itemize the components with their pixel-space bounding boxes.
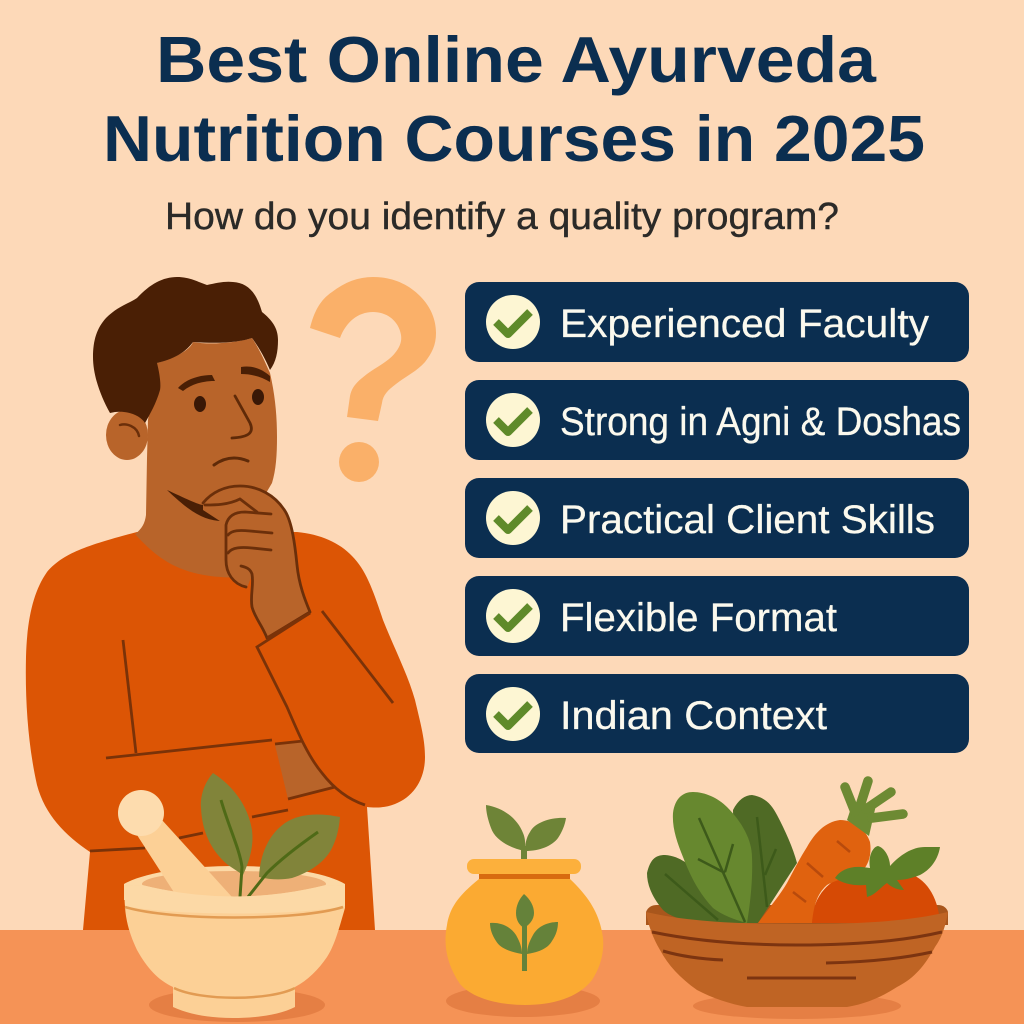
chin shadow: [167, 490, 238, 521]
checklist: [465, 282, 969, 753]
mortar lip: [124, 885, 345, 914]
hair: [93, 277, 278, 423]
ear: [106, 410, 148, 460]
sprout: [486, 805, 566, 859]
item: Flexible Format: [465, 576, 969, 656]
item: Practical Client Skills: Practical Client Skills: [560, 498, 935, 542]
basket back rim: [646, 905, 948, 925]
title: [103, 23, 925, 175]
sleeve fold lines: [106, 611, 393, 758]
pestle: [118, 790, 232, 897]
icon: pot with sprout: [446, 805, 603, 1017]
item: Strong in Agni & Doshas: Strong in Agni & Doshas: [560, 400, 961, 444]
title: Best Online Ayurveda: [156, 23, 877, 96]
mortar back rim: [124, 866, 345, 900]
icon: vegetable basket: [646, 781, 948, 1019]
spinach leaves: [647, 792, 797, 923]
eyebrows: [178, 366, 270, 391]
subtitle: How do you identify a quality program?: [165, 196, 839, 238]
mortar bowl: [124, 885, 345, 1018]
pot body: [446, 879, 603, 1005]
mouth: [214, 458, 248, 465]
eyes: [194, 389, 264, 412]
item: Experienced Faculty: Experienced Faculty: [560, 302, 929, 346]
waist gap skin patch: [275, 742, 334, 799]
leaves: [201, 773, 340, 897]
table surface: [0, 930, 1024, 1024]
nose: [232, 396, 251, 438]
hand: [203, 486, 310, 638]
tomato calyx: [835, 846, 940, 897]
question mark icon: [310, 277, 436, 482]
person: [26, 277, 425, 930]
item: Experienced Faculty: [465, 282, 969, 362]
basket bowl: [646, 912, 948, 1007]
carrot: [758, 820, 871, 923]
title: Nutrition Courses in 2025: [103, 102, 925, 175]
item: Indian Context: Indian Context: [560, 694, 827, 738]
item: Indian Context: [465, 674, 969, 753]
carrot greens: [845, 781, 903, 836]
forearm outline and waist lines: [90, 613, 365, 851]
sweater body: [26, 532, 425, 930]
icon: mortar and pestle: [118, 773, 345, 1022]
item: Practical Client Skills: [465, 478, 969, 558]
item: Strong in Agni & Doshas: [465, 380, 969, 460]
item: Flexible Format: Flexible Format: [560, 596, 837, 640]
tomato: [812, 870, 940, 923]
basket weave lines: [652, 932, 942, 978]
pot emblem: [490, 894, 558, 971]
neck and face: [135, 338, 277, 578]
